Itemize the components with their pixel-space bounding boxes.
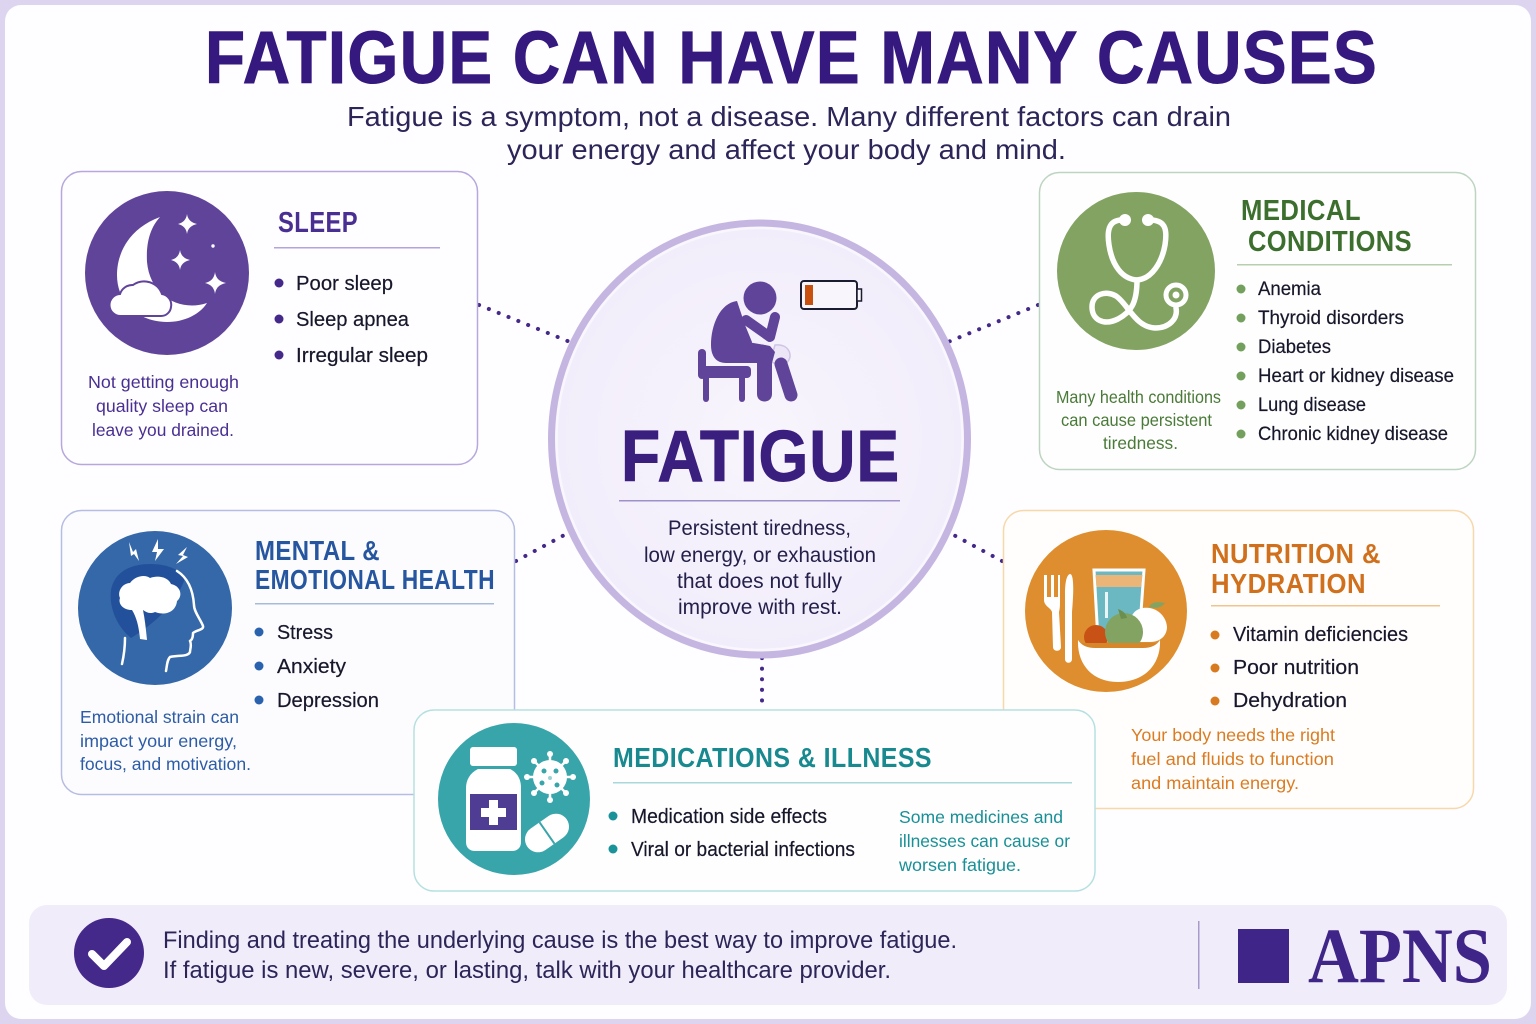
- dotted connectors: [479, 305, 1038, 710]
- caption: mental health: impact your energy,: [80, 731, 237, 751]
- icon: moon and stars: [85, 191, 249, 355]
- panel: mental and emotional health: [62, 510, 514, 794]
- caption: mental health: focus, and motivation.: [80, 754, 251, 774]
- title: FATIGUE CAN HAVE MANY CAUSES: [205, 16, 1378, 99]
- heading: fatigue: FATIGUE: [621, 417, 900, 497]
- heading: mental and emotional health: EMOTIONAL HEALTH: [255, 564, 495, 595]
- icon: head with brain: [78, 531, 232, 685]
- heading: medical conditions: CONDITIONS: [1248, 226, 1412, 258]
- panel: nutrition and hydration: [1004, 510, 1474, 808]
- list: mental health: [254, 621, 379, 712]
- heading: mental and emotional health: MENTAL &: [255, 535, 380, 566]
- description: Persistent tiredness,: [668, 517, 851, 540]
- panel: medical conditions: [1040, 172, 1476, 470]
- caption: medical conditions: tiredness.: [1103, 433, 1178, 453]
- heading: medications and illness: MEDICATIONS & ILLNESS: [613, 742, 932, 773]
- caption: nutrition: and maintain energy.: [1131, 773, 1299, 793]
- caption: sleep: leave you drained.: [92, 420, 234, 440]
- heading: sleep: SLEEP: [278, 207, 358, 239]
- callout bar: [29, 905, 1507, 1005]
- subtitle: Fatigue is a symptom, not a disease. Many different factors can drain: [347, 101, 1231, 132]
- caption: medications: worsen fatigue.: [898, 855, 1021, 875]
- list: nutrition: Vitamin deficiencies: [1233, 623, 1408, 646]
- list: medications: Viral or bacterial infections: [631, 838, 855, 861]
- description: low energy, or exhaustion: [644, 544, 876, 567]
- list: nutrition: Poor nutrition: [1233, 656, 1359, 679]
- panel: sleep: [62, 172, 478, 464]
- caption: medications: illnesses can cause or: [899, 831, 1070, 851]
- caption: medical conditions: Many health conditions: [1056, 387, 1221, 407]
- caption: medications: Some medicines and: [899, 807, 1063, 827]
- caption: medical conditions: [1056, 387, 1221, 453]
- heading: nutrition and hydration: NUTRITION &: [1211, 538, 1381, 569]
- heading: medical conditions: [1241, 195, 1412, 258]
- caption: mental health: [80, 707, 251, 774]
- list: sleep causes: [274, 272, 428, 367]
- subtitle: your energy and affect your body and mind.: [507, 134, 1066, 165]
- list: sleep causes: Poor sleep: [296, 272, 393, 295]
- caption: nutrition: [1131, 725, 1335, 793]
- list: medical conditions: Heart or kidney disease: [1258, 366, 1454, 387]
- caption: nutrition: fuel and fluids to function: [1131, 749, 1334, 769]
- caption: sleep: quality sleep can: [96, 396, 228, 416]
- callout text: Finding and treating the underlying cause is the best way to improve fatigue.: [163, 927, 957, 954]
- subtitle: [347, 101, 1231, 165]
- list: nutrition: [1210, 623, 1408, 712]
- list: medical conditions: Chronic kidney disease: [1258, 424, 1448, 445]
- list: medical conditions: Thyroid disorders: [1258, 308, 1404, 329]
- description: [644, 517, 876, 619]
- list: medications: Medication side effects: [631, 805, 827, 828]
- caption: medical conditions: can cause persistent: [1061, 410, 1212, 430]
- description: that does not fully: [677, 570, 842, 593]
- list: mental health: Anxiety: [277, 655, 347, 678]
- callout text: If fatigue is new, severe, or lasting, talk with your healthcare provider.: [163, 957, 891, 984]
- caption: sleep: Not getting enough: [88, 372, 239, 392]
- caption: nutrition: Your body needs the right: [1131, 725, 1335, 745]
- list: mental health: Stress: [277, 621, 333, 644]
- heading: medical conditions: MEDICAL: [1241, 195, 1361, 227]
- heading: nutrition and hydration: HYDRATION: [1211, 568, 1366, 599]
- icon: low battery: [801, 281, 862, 309]
- icon: food and water: [1025, 530, 1187, 692]
- central circle: fatigue: [552, 223, 968, 655]
- list: nutrition: Dehydration: [1233, 689, 1347, 712]
- description: improve with rest.: [678, 596, 842, 619]
- caption: mental health: Emotional strain can: [80, 707, 239, 727]
- list: sleep causes: Sleep apnea: [296, 308, 410, 331]
- list: mental health: Depression: [277, 689, 379, 712]
- panel: medications and illness: [414, 710, 1095, 891]
- list: medications: [608, 805, 855, 861]
- icon: medicine bottle, virus and pill: [438, 723, 590, 875]
- caption: medications: [898, 807, 1070, 875]
- heading: nutrition and hydration: [1211, 538, 1381, 599]
- icon: check mark: [74, 918, 144, 988]
- list: medical conditions: [1236, 279, 1454, 445]
- icon: tired person on a stool: [698, 282, 791, 402]
- list: medical conditions: Lung disease: [1258, 395, 1366, 416]
- list: medical conditions: Diabetes: [1258, 337, 1331, 358]
- list: sleep causes: Irregular sleep: [296, 344, 428, 367]
- logo: APNS: APNS: [1308, 912, 1492, 999]
- list: medical conditions: Anemia: [1258, 279, 1321, 300]
- heading: mental and emotional health: [255, 535, 495, 595]
- logo: APNS: [1238, 912, 1492, 999]
- callout text: [163, 927, 957, 984]
- icon: stethoscope: [1057, 192, 1215, 350]
- caption: sleep: [88, 372, 239, 440]
